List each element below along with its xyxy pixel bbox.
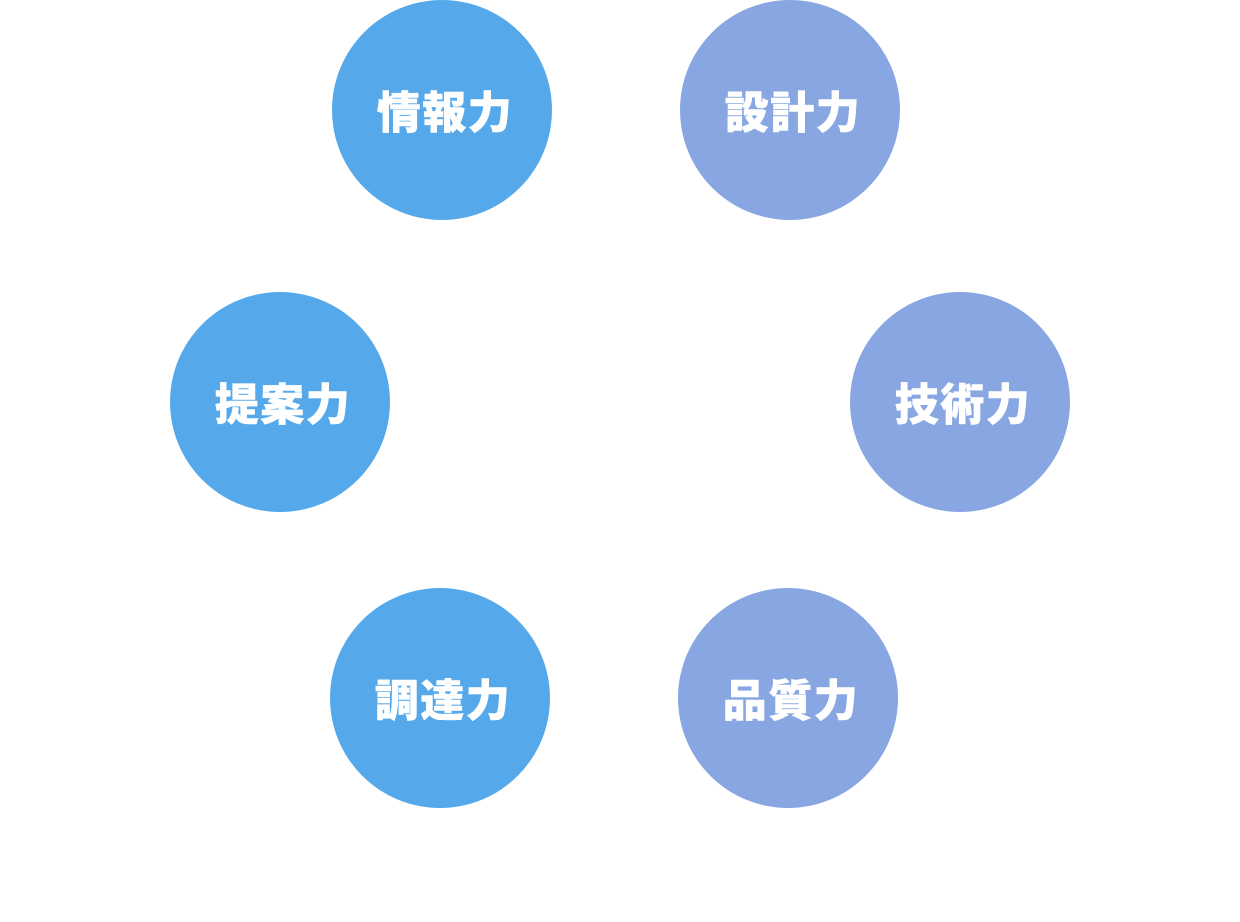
circle: 提案力 [170, 292, 390, 512]
circle: 設計力: 設計力 [725, 89, 861, 138]
circle: 技術力 [850, 292, 1070, 512]
circle: 調達力 [330, 588, 550, 808]
circle: 技術力: 技術力 [895, 381, 1031, 430]
circle: 調達力: 調達力 [375, 677, 511, 726]
circle: 情報力: 情報力 [377, 89, 513, 138]
circle: 品質力: 品質力 [723, 677, 859, 726]
circle: 設計力 [680, 0, 900, 220]
circle: 提案力: 提案力 [215, 381, 351, 430]
circle: 品質力 [678, 588, 898, 808]
circle: 情報力 [332, 0, 552, 220]
